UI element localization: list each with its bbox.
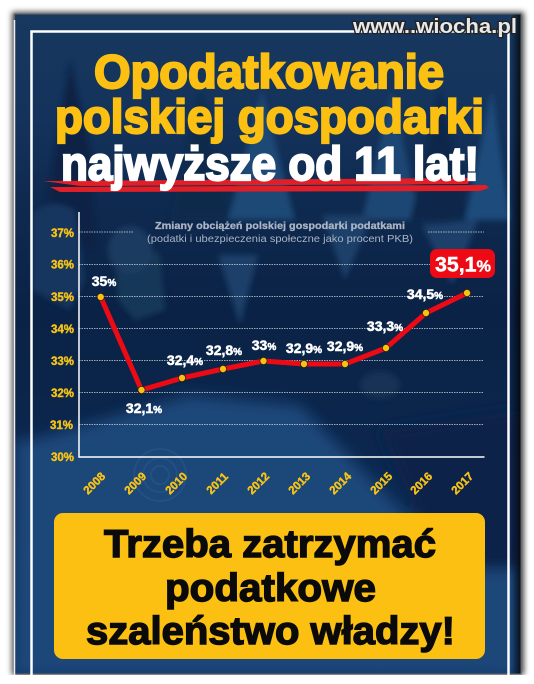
data line: [101, 293, 467, 390]
data labels: [92, 273, 443, 416]
data labels: 34,5%: [407, 286, 443, 302]
title line 1: Opodatkowanie: [94, 45, 444, 98]
x axis labels: 2012: [246, 471, 272, 497]
axes: [79, 212, 484, 457]
callout text: [86, 522, 455, 652]
y axis labels: 37%: [51, 228, 74, 240]
title: [43, 45, 489, 192]
callout: [54, 513, 485, 659]
x axis labels: 2016: [409, 471, 435, 497]
data labels: 33,3%: [367, 318, 403, 334]
callout box: [54, 513, 485, 659]
right edge shadow: [512, 14, 520, 674]
callout text: szaleństwo władzy!: [86, 609, 455, 652]
callout text: podatkowe: [165, 566, 376, 609]
data labels: 32,9%: [286, 340, 322, 356]
chart subtitle: Zmiany obciążeń polskiej gospodarki podatkami: [155, 220, 405, 232]
x axis labels: 2013: [287, 471, 313, 497]
y axis labels: 34%: [51, 324, 74, 336]
x axis labels: 2009: [123, 471, 149, 497]
y axis labels: 31%: [50, 420, 73, 432]
background photo: banknote: [15, 395, 520, 674]
data labels: 35%: [92, 273, 116, 289]
y axis labels: 36%: [51, 260, 74, 272]
data labels: 32,8%: [206, 342, 242, 358]
chart: [50, 212, 495, 497]
red underline: [43, 178, 489, 192]
y axis labels: 32%: [51, 388, 74, 400]
data labels: 32,1%: [126, 400, 162, 416]
highlight badge: 35,1%: [430, 249, 495, 278]
callout text: Trzeba zatrzymać: [104, 522, 436, 565]
data labels: 32,9%: [327, 338, 363, 354]
y axis labels: 33%: [51, 356, 74, 368]
x axis labels: 2015: [369, 470, 396, 497]
left panel edge line: [14, 20, 16, 684]
x axis labels: 2011: [205, 470, 231, 497]
chart subtitle: [147, 220, 413, 245]
highlight badge: 35,1%: 35,1%: [435, 254, 491, 276]
x axis labels: [82, 470, 476, 497]
grid lines: [79, 232, 484, 424]
title line 2: polskiej gospodarki: [55, 90, 484, 143]
x axis labels: 2014: [328, 470, 355, 497]
background photo: flags and people: [32, 60, 510, 399]
watermark: www..wiocha.pl: [352, 16, 517, 38]
y axis labels: 35%: [51, 292, 74, 304]
x axis labels: 2010: [164, 471, 190, 497]
data points: [97, 289, 471, 394]
x axis labels: 2008: [82, 470, 109, 497]
y axis labels: [50, 228, 74, 464]
chart subtitle: (podatki i ubezpieczenia społeczne jako procent PKB): [147, 233, 413, 245]
data labels: 32,4%: [167, 352, 203, 368]
x axis labels: 2017: [450, 471, 476, 497]
page bottom fade: [0, 675, 534, 684]
y axis labels: 30%: [51, 452, 74, 464]
title line 3: najwyższe od 11 lat!: [61, 137, 479, 190]
data labels: 33%: [252, 337, 276, 353]
